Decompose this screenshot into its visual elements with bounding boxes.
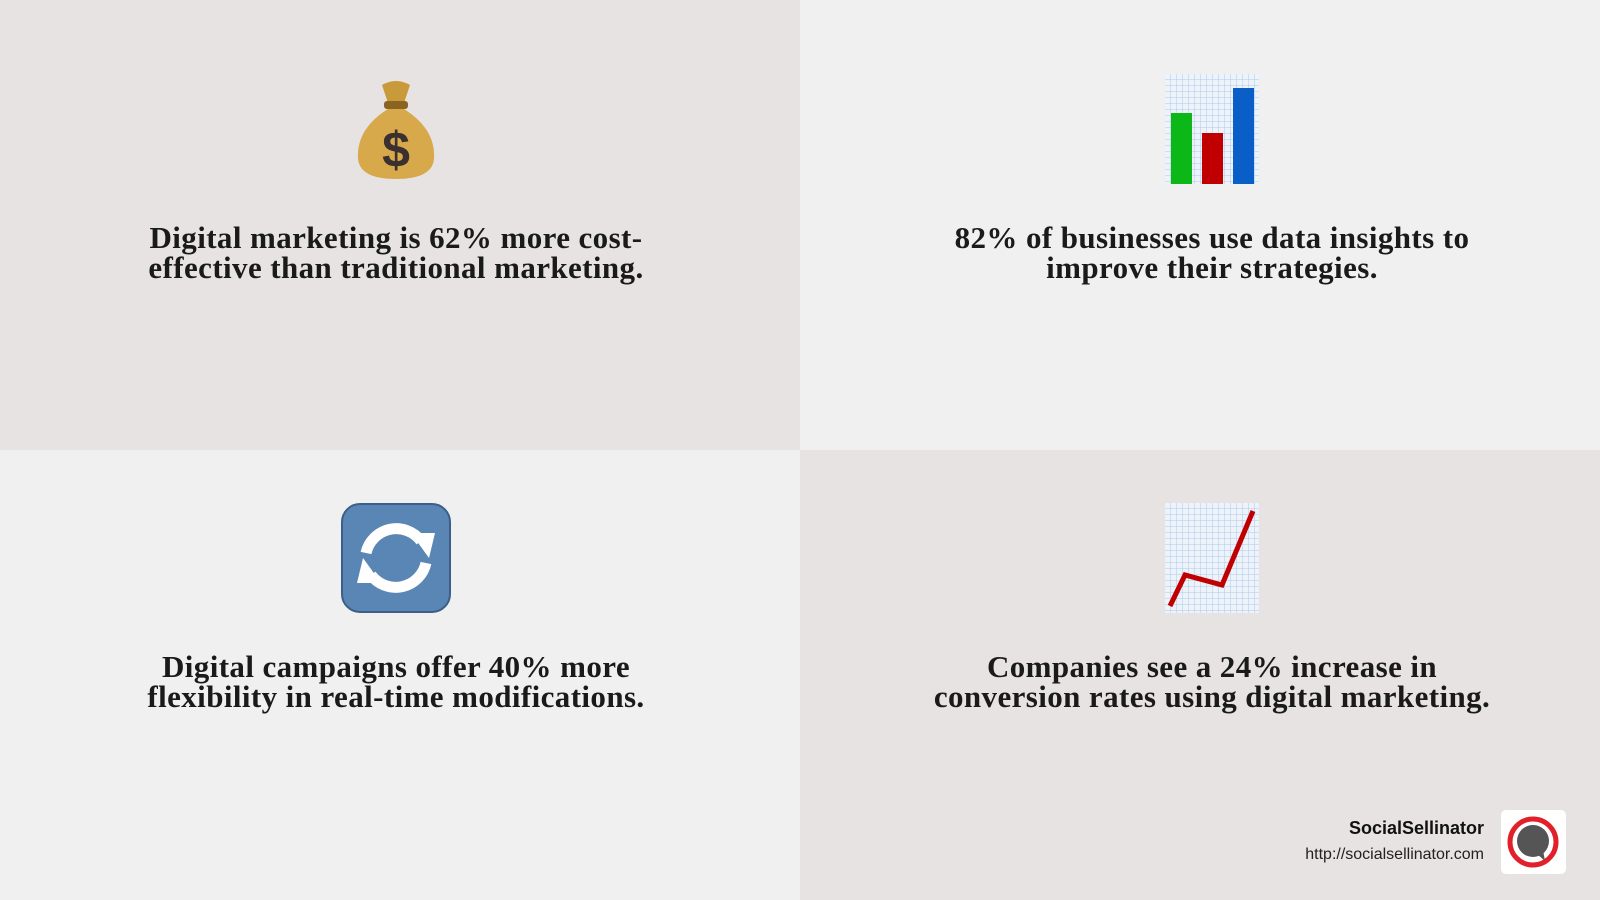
text: flexibility: flexibility in real-time modifications. (147, 679, 645, 714)
panel: flexibility (0, 450, 800, 900)
text: flexibility (147, 649, 645, 714)
text: cost-effective (148, 220, 644, 285)
text: cost-effective: Digital marketing is 62% more cost- (150, 220, 642, 255)
text: data insights (955, 220, 1469, 285)
icon: money bag (358, 81, 434, 179)
brand name: SocialSellinator (1349, 818, 1484, 838)
icon: bar chart (1165, 74, 1259, 184)
text: flexibility: Digital campaigns offer 40% more (162, 649, 630, 684)
icon: logo (1501, 810, 1566, 874)
icon: money bag: $ (382, 122, 410, 178)
text: conversion (934, 649, 1490, 714)
text: data insights: improve their strategies. (1046, 250, 1378, 285)
brand: SocialSellinator (1305, 810, 1566, 874)
icon: trend chart (1165, 503, 1259, 613)
panel: data insights (800, 0, 1600, 450)
panel: cost-effective (0, 0, 800, 450)
text: conversion: Companies see a 24% increase in (987, 649, 1437, 684)
text: conversion: conversion rates using digital marketing. (934, 679, 1490, 714)
text: cost-effective: effective than traditional marketing. (148, 250, 644, 285)
panel: conversion (800, 450, 1600, 900)
brand url: http://socialsellinator.com (1305, 846, 1484, 863)
icon: refresh arrows (341, 503, 451, 613)
text: data insights: 82% of businesses use data insights to (955, 220, 1469, 255)
